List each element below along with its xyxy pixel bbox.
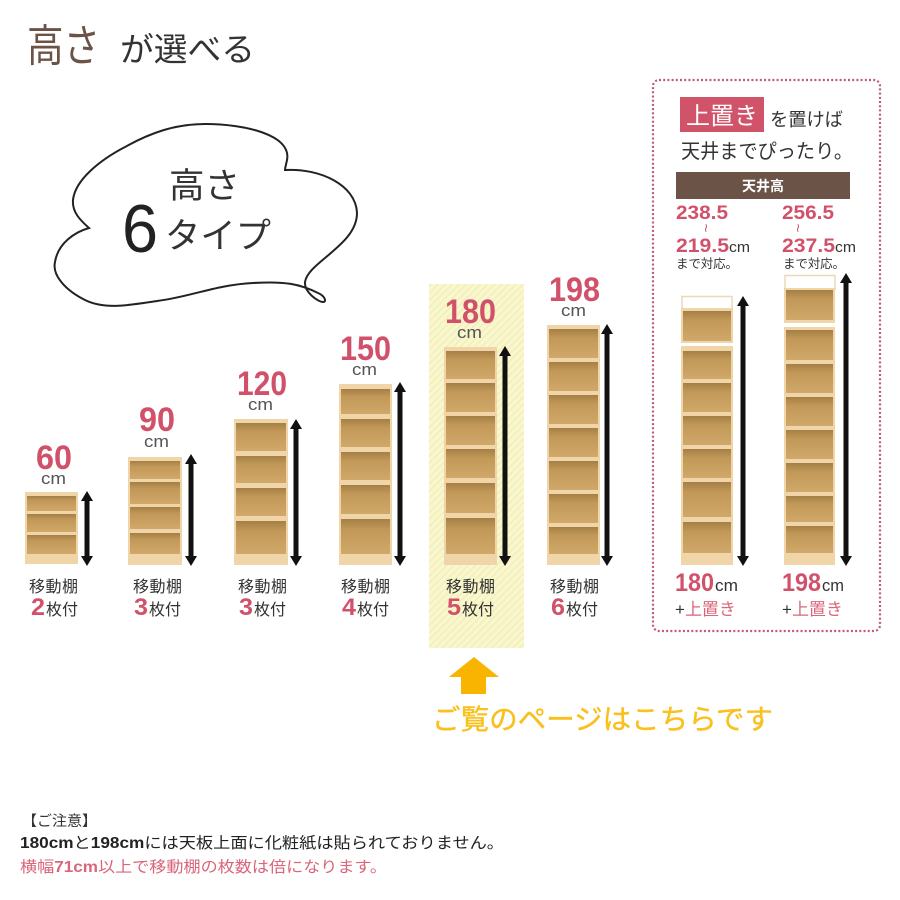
shelf column: 120 cm: 3 <box>239 594 253 621</box>
notes: 横幅71cm 以上で移動棚の枚数は倍になります。 <box>20 858 387 876</box>
shelf column: 150 cm: cm <box>352 360 377 379</box>
notes <box>20 813 504 876</box>
shelf column: 90 cm: 移動棚 <box>133 578 182 596</box>
range: 219.5 to 238.5 cm: まで対応。 <box>676 257 738 271</box>
speech bubble: height 6 types: 6 <box>122 191 158 267</box>
heading text <box>681 109 853 163</box>
range: 219.5 to 238.5 cm: 238.5 <box>676 203 728 224</box>
speech bubble: height 6 types: タイプ <box>165 217 271 256</box>
shelf: 180 cm plus top unit: 180 <box>675 569 714 597</box>
ceiling height bar <box>676 172 850 199</box>
title <box>27 22 255 71</box>
shelf column: 60 cm: cm <box>41 469 66 488</box>
range: 237.5 to 256.5 cm: 237.5 <box>782 236 835 257</box>
shelf column: 180 cm <box>444 293 511 621</box>
heading text: を置けば <box>770 109 843 130</box>
shelf: 180 cm plus top unit: cm <box>715 576 738 595</box>
shelf column: 180 cm: 180 <box>445 293 496 331</box>
shelf column: 150 cm: 枚付 <box>357 601 389 619</box>
label: top unit tag <box>680 97 764 132</box>
shelf column: 120 cm: 120 <box>237 365 287 403</box>
callout: this page: ご覧のページはこちらです <box>432 704 773 735</box>
ceiling height bar: 天井高 <box>742 178 784 194</box>
shelf: 198 cm plus top unit: cm <box>822 576 844 595</box>
shelf column: 198 cm: 6 <box>551 594 565 621</box>
shelf column: 180 cm: 移動棚 <box>446 578 495 596</box>
shelf column: 90 cm: cm <box>144 432 169 451</box>
notes: 【ご注意】 <box>22 813 97 830</box>
shelf column: 120 cm: 枚付 <box>254 601 286 619</box>
shelf column: 60 cm: 2 <box>31 594 45 621</box>
range: 237.5 to 256.5 cm: ~ <box>789 224 806 233</box>
shelf column: 198 cm <box>547 271 613 621</box>
range: 237.5 to 256.5 cm: まで対応。 <box>783 257 845 271</box>
shelf column: 90 cm: 3 <box>134 594 148 621</box>
label: top unit tag: 上置き <box>686 103 758 130</box>
highlight band: 180 cm column <box>429 284 524 648</box>
shelf: 198 cm plus top unit: +上置き <box>782 600 843 619</box>
shelf column: 180 cm: 5 <box>447 594 461 621</box>
shelf column: 120 cm: cm <box>248 395 273 414</box>
range: 219.5 to 238.5 cm: ~ <box>697 224 714 233</box>
shelf column: 60 cm <box>25 439 93 621</box>
shelf column: 90 cm: 90 <box>139 401 175 439</box>
arrow: points up to 180 cm column <box>449 657 499 694</box>
notes: 180cm と198cm には天板上面に化粧紙は貼られておりません。 <box>20 834 504 852</box>
shelf column: 198 cm: 移動棚 <box>550 578 599 596</box>
range: 219.5 to 238.5 cm <box>676 203 750 271</box>
range: 237.5 to 256.5 cm: 256.5 <box>782 203 834 224</box>
panel: top unit option <box>653 80 880 631</box>
shelf: 198 cm plus top unit <box>782 273 852 619</box>
shelf column: 150 cm: 150 <box>340 330 391 368</box>
shelf column: 120 cm <box>234 365 302 621</box>
shelf column: 120 cm: 移動棚 <box>238 578 287 596</box>
shelf column: 150 cm: 4 <box>342 594 357 621</box>
shelf: 198 cm plus top unit: 198 <box>782 569 821 597</box>
shelf column: 198 cm: cm <box>561 301 586 320</box>
range: 237.5 to 256.5 cm <box>782 203 856 271</box>
shelf column: 198 cm: 198 <box>549 271 600 309</box>
shelf column: 150 cm <box>339 330 406 621</box>
shelf column: 150 cm: 移動棚 <box>341 578 390 596</box>
title: が選べる <box>120 31 255 68</box>
shelf column: 60 cm: 60 <box>36 439 72 477</box>
shelf column: 60 cm: 枚付 <box>46 601 78 619</box>
speech bubble: height 6 types: 高さ <box>169 167 240 206</box>
shelf column: 180 cm: cm <box>457 323 482 342</box>
shelf column: 90 cm: 枚付 <box>149 601 181 619</box>
range: 219.5 to 238.5 cm: cm <box>729 239 750 256</box>
range: 237.5 to 256.5 cm: cm <box>835 239 856 256</box>
shelf column: 90 cm <box>128 401 197 621</box>
shelf column: 180 cm: 枚付 <box>462 601 494 619</box>
shelf column: 198 cm: 枚付 <box>566 601 598 619</box>
speech bubble: height 6 types <box>55 124 357 306</box>
title: 高さ <box>27 22 100 71</box>
heading text: 天井までぴったり。 <box>681 140 853 163</box>
shelf: 180 cm plus top unit: +上置き <box>675 600 736 619</box>
shelf: 180 cm plus top unit <box>675 296 749 619</box>
shelf column: 60 cm: 移動棚 <box>29 578 78 596</box>
range: 219.5 to 238.5 cm: 219.5 <box>676 236 729 257</box>
